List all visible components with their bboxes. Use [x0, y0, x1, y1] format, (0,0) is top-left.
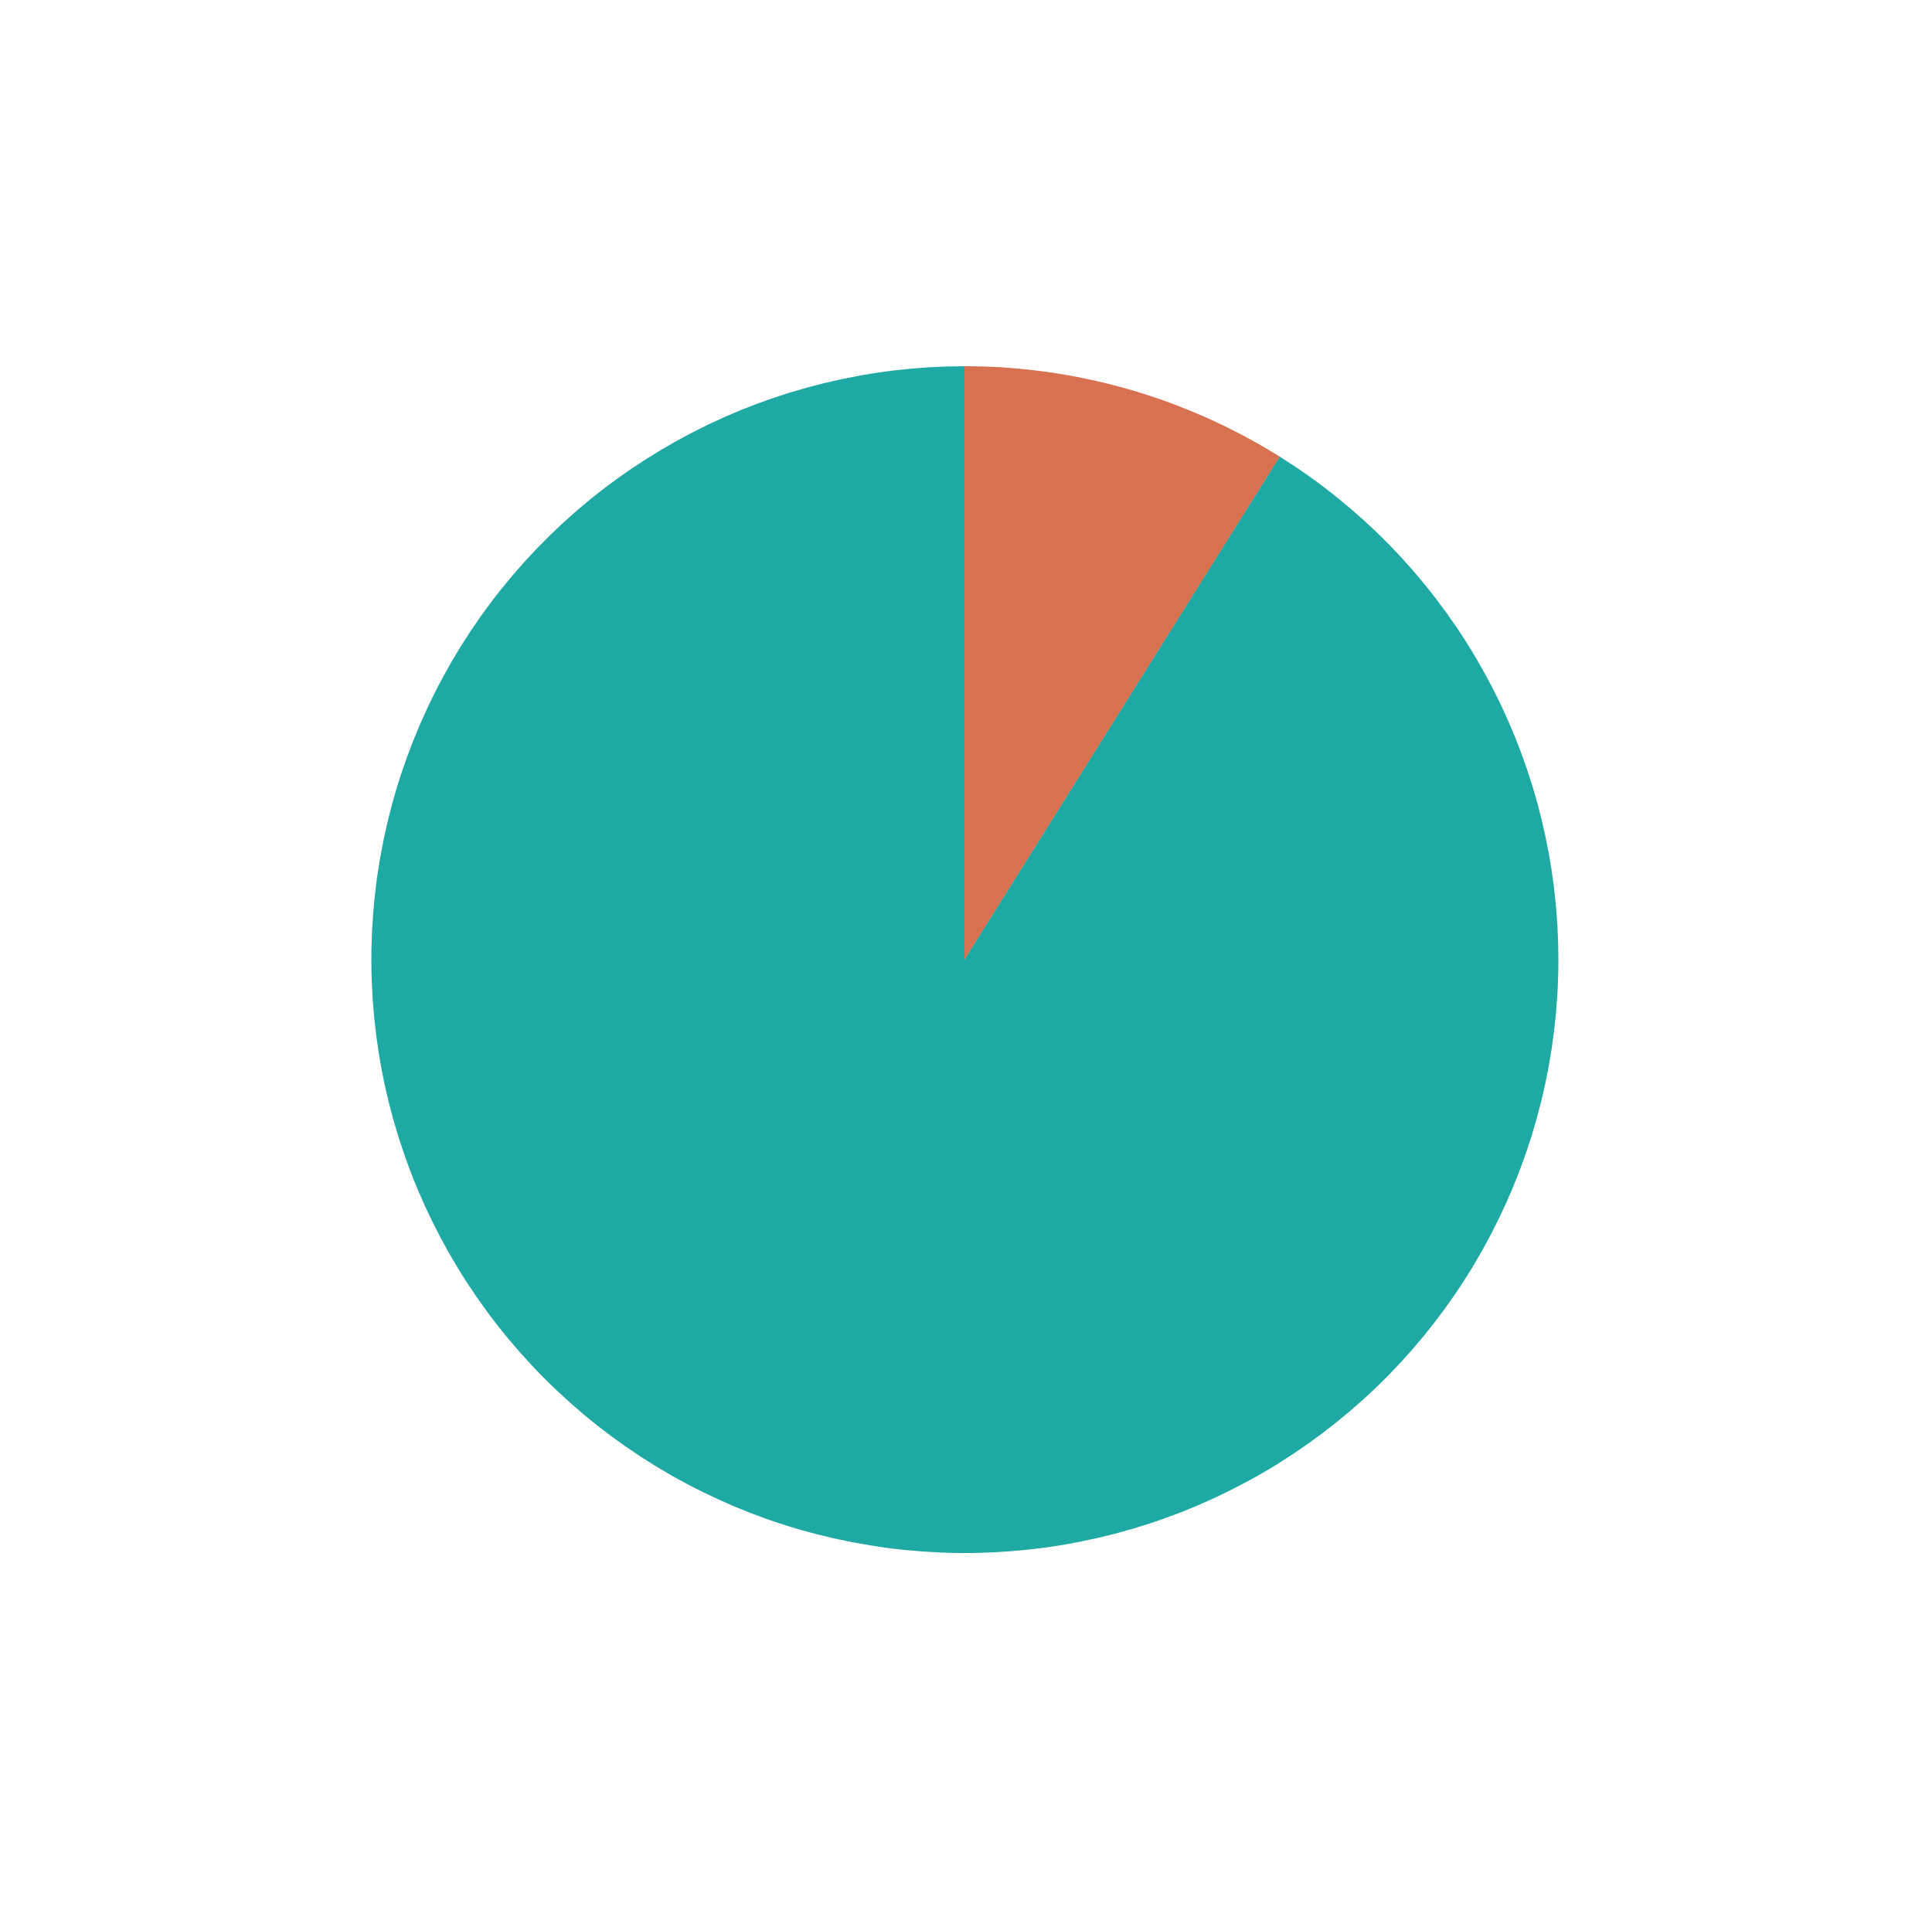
pie slice: teal majority [372, 366, 1559, 1553]
pie slice: orange minority [964, 366, 1280, 960]
